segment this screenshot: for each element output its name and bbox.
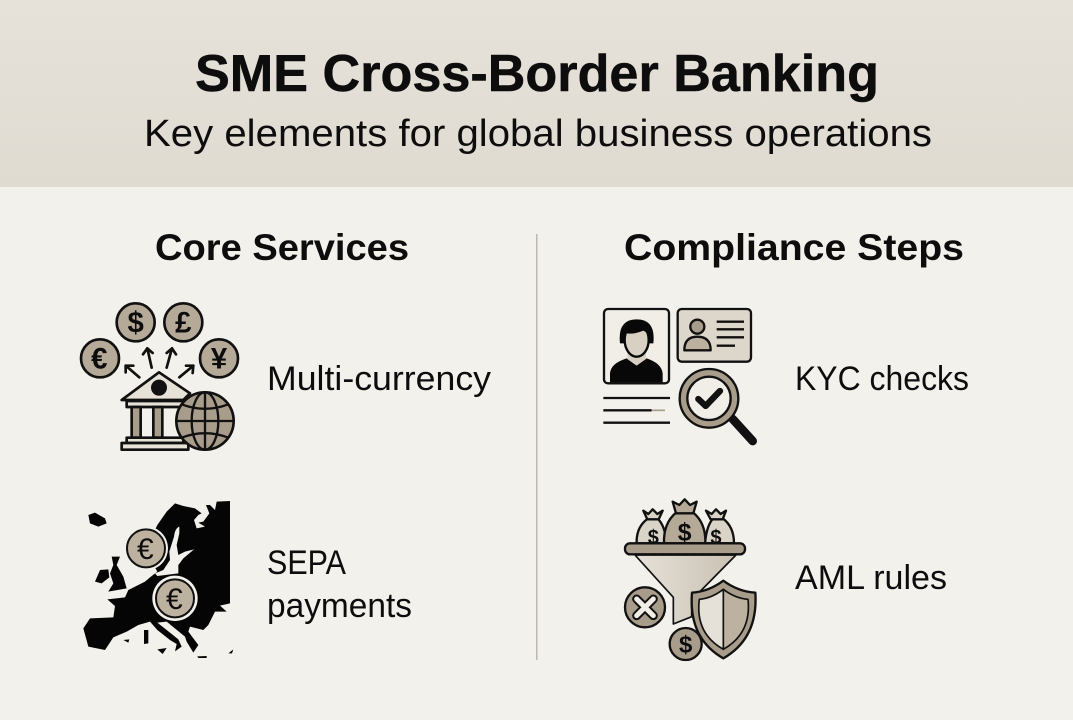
icon: bank with currencies: ¥ <box>211 343 228 376</box>
icon: aml funnel and shield: $ <box>710 527 722 549</box>
icon: bank with currencies: $ <box>128 307 144 340</box>
panel: compliance steps <box>603 227 969 660</box>
label: sepa payments <box>267 544 412 625</box>
icon: europe map: € <box>166 583 183 616</box>
label: kyc checks: KYC checks <box>795 360 969 398</box>
label: multi-currency: Multi-currency <box>267 360 491 398</box>
icon: aml funnel and shield: $ <box>678 520 692 547</box>
heading: compliance steps: Compliance Steps <box>624 227 964 268</box>
label: aml rules: AML rules <box>795 559 947 597</box>
subtitle: Key elements for global business operations <box>144 113 932 155</box>
icon: kyc id check <box>603 309 753 441</box>
icon: aml funnel and shield: $ <box>648 527 659 549</box>
icon: europe map <box>83 501 233 658</box>
icon: bank with currencies <box>81 303 238 450</box>
icon: aml funnel and shield: $ <box>679 632 692 659</box>
label: sepa payments: payments <box>267 587 412 625</box>
heading: core services: Core Services <box>155 227 409 268</box>
icon: europe map: € <box>137 533 154 566</box>
label: sepa payments: SEPA <box>267 544 346 582</box>
title: SME Cross-Border Banking <box>195 45 879 103</box>
icon: bank with currencies: £ <box>175 307 192 340</box>
icon: aml funnel and shield <box>625 499 756 660</box>
panel: core services <box>81 227 491 658</box>
header band <box>0 0 1073 187</box>
icon: bank with currencies: € <box>91 343 107 376</box>
